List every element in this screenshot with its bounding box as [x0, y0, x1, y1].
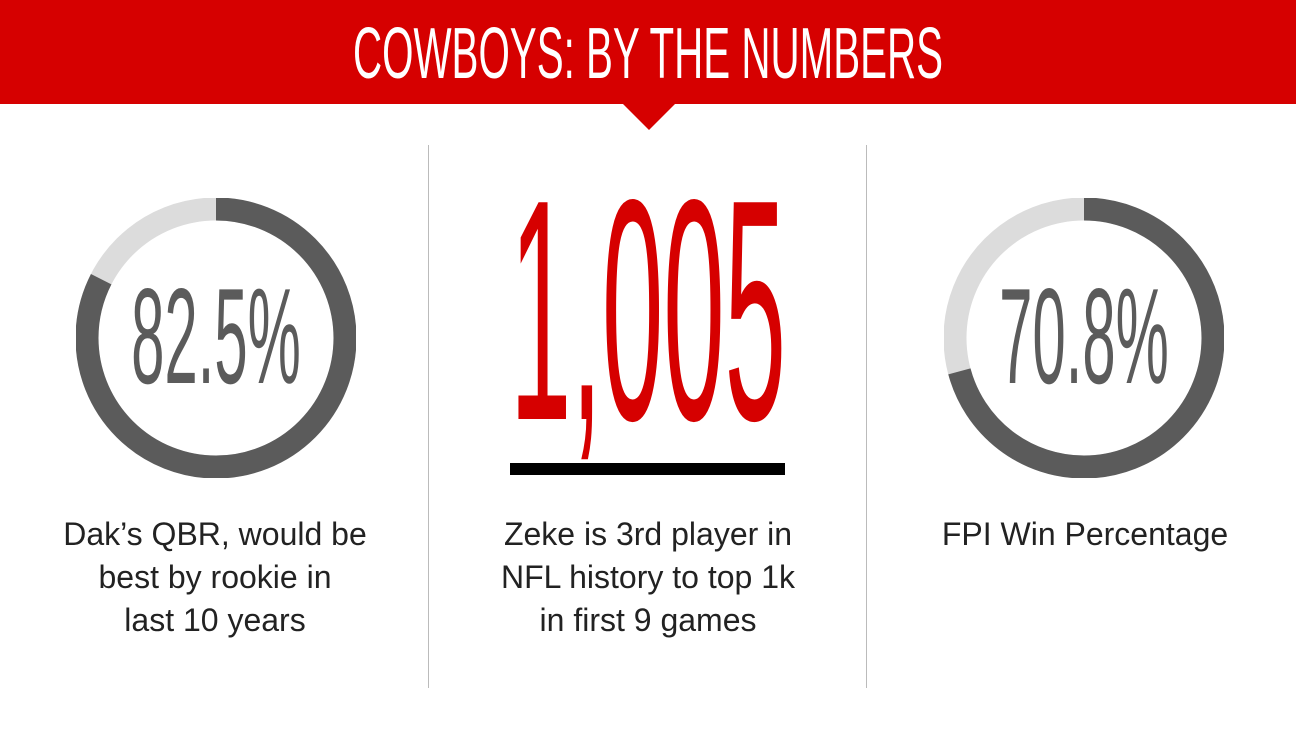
caption left: last 10 years	[124, 602, 306, 638]
panel: left donut	[76, 198, 356, 478]
caption right: FPI Win Percentage	[942, 516, 1228, 552]
caption left: Dak’s QBR, would be	[63, 516, 367, 552]
stat 82.5%: 82.5%	[131, 260, 301, 412]
caption left: best by rookie in	[98, 559, 332, 595]
caption center: Zeke is 3rd player in	[504, 516, 792, 552]
header banner	[0, 0, 1296, 130]
stat 70.8%: 70.8%	[999, 260, 1169, 412]
caption center	[501, 516, 795, 638]
caption center: in first 9 games	[540, 602, 756, 638]
caption center: NFL history to top 1k	[501, 559, 795, 595]
caption left	[63, 516, 367, 638]
panel: center big number: 1,005	[510, 134, 786, 486]
panel: right donut	[944, 198, 1224, 478]
title: COWBOYS: BY THE NUMBERS	[353, 14, 943, 94]
